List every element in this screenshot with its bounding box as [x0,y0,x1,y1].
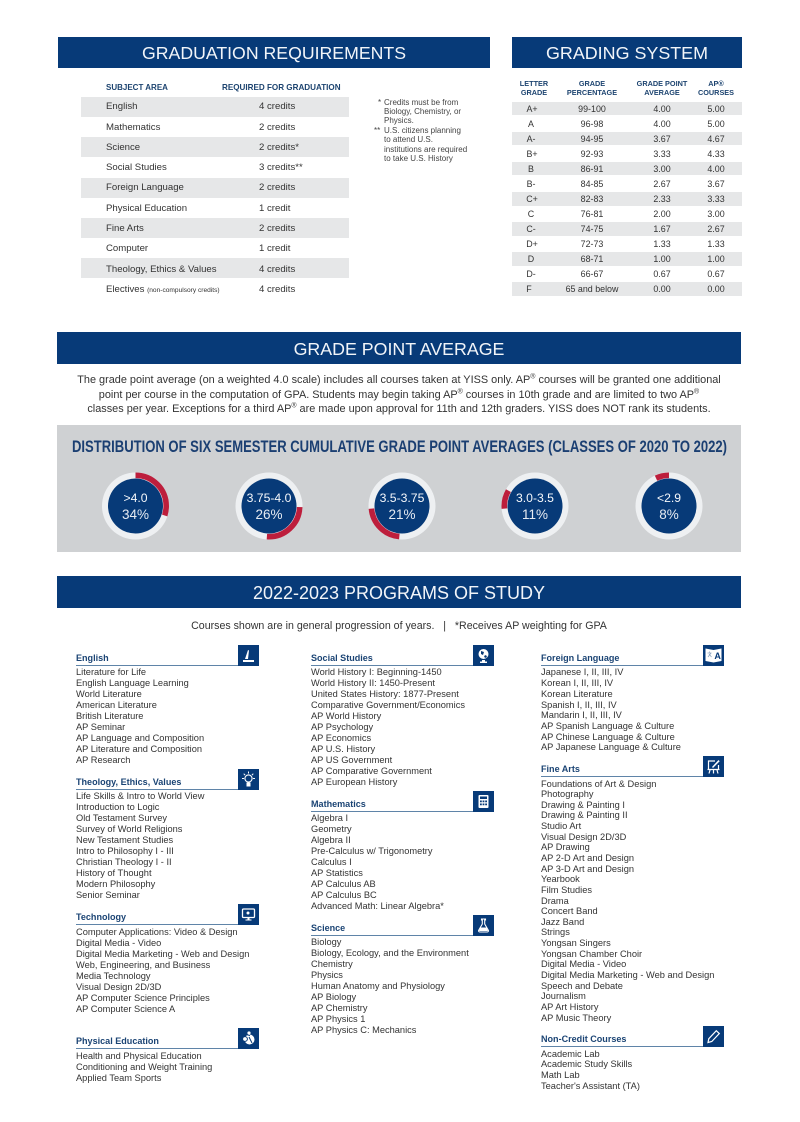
table: grading system: 2.00 [653,209,671,219]
footnotes: credit notes: Biology, Chemistry, or [384,107,461,116]
section: Social Studies: AP European History [311,776,397,786]
table: grading system: 1.33 [707,239,725,249]
table: grading system: 4.00 [653,104,671,114]
donut: 3.75-4.0: 26% [255,507,283,522]
table: grading system: D- [526,269,536,279]
section: Physical Education: Conditioning and Weight Training [76,1062,212,1072]
section: Foreign Language: Mandarin I, II, III, IV [541,710,622,720]
section: Physical Education: Physical Education [76,1036,159,1046]
icon: language book [703,645,724,666]
table: graduation requirements: 2 credits* [259,142,299,153]
table: grading system [512,79,742,296]
table: grading system: COURSES [698,88,734,97]
section: English: English [76,653,109,663]
table: grading system: 4.67 [707,134,725,144]
section: Fine Arts: Drawing & Painting I [541,800,625,810]
table: graduation requirements: Theology, Ethics & Values [106,264,217,275]
section: Technology: Media Technology [76,971,151,981]
section: Non-Credit Courses: Math Lab [541,1070,580,1080]
section: Fine Arts: Jazz Band [541,917,584,927]
table: graduation requirements: 4 credits [259,264,295,275]
text block: programs note: Courses shown are in general progression of years. | *Receives AP weighting for GPA [191,620,607,632]
section: Social Studies: Comparative Government/Economics [311,700,465,710]
section: English [76,645,259,764]
table: grading system: GRADE [521,88,547,97]
table: grading system: 4.00 [653,118,671,128]
section: Foreign Language: Foreign Language [541,653,619,663]
table: grading system: 0.67 [707,269,725,279]
section: English: AP Research [76,754,130,764]
section: Mathematics: Geometry [311,824,352,834]
icon: language book: A [714,651,721,661]
section: Fine Arts: Drama [541,896,569,906]
donut: 3.5-3.75 [368,472,436,540]
section: Theology, Ethics, Values [76,769,259,900]
donut: above 4.0: 34% [122,507,149,522]
table: grading system: 3.33 [653,149,671,159]
section: Fine Arts: Strings [541,927,570,937]
text block: gpa explanation [77,373,721,415]
donut: 3.0-3.5: 11% [522,507,548,522]
section: Science: AP Biology [311,992,356,1002]
section: Fine Arts: Studio Art [541,821,581,831]
section: Social Studies: AP Comparative Government [311,766,432,776]
table: grading system: 4.33 [707,149,725,159]
section: Fine Arts: Yongsan Chamber Choir [541,949,642,959]
section: Theology, Ethics, Values: Old Testament Survey [76,812,167,822]
section: Science: AP Chemistry [311,1002,367,1012]
table: grading system: B [528,164,534,174]
table: grading system: 4.00 [707,164,725,174]
footnotes: credit notes [374,98,467,163]
donut: below 2.9 [628,465,710,547]
heading: grading system: GRADING SYSTEM [546,43,708,63]
section: Mathematics: Calculus I [311,856,352,866]
section: Physical Education: Health and Physical Education [76,1051,202,1061]
table: grading system: 1.00 [707,254,725,264]
section: Mathematics: Mathematics [311,799,366,809]
section: Technology [76,904,259,1014]
table: grading system: 1.33 [653,239,671,249]
table: graduation requirements: Electives (non-compulsory credits) [106,284,220,295]
icon: light bulb [238,769,259,790]
section: Social Studies: AP U.S. History [311,744,375,754]
section: Fine Arts: Fine Arts [541,764,580,774]
donut: 3.75-4.0: 3.75-4.0 [247,491,292,505]
table: grading system: 74-75 [581,224,603,234]
section: Mathematics [311,791,494,911]
table: grading system: 1.00 [653,254,671,264]
table: grading system: 76-81 [581,209,603,219]
table: graduation requirements: 3 credits** [259,162,303,173]
heading: grade point average: GRADE POINT AVERAGE [294,339,504,359]
section: Foreign Language: AP Spanish Language & Culture [541,721,674,731]
text block: gpa explanation: classes per year. Exceptions for a third AP® are made upon approval for 11th and 12th graders. YISS does NOT rank its students. [87,403,711,415]
table: grading system: 72-73 [581,239,603,249]
footnotes: credit notes: * [378,98,381,106]
table: graduation requirements: Mathematics [106,122,160,133]
section: Foreign Language: Korean I, II, III, IV [541,678,613,688]
table: graduation requirements: 1 credit [259,243,290,254]
section: Science: AP Physics 1 [311,1014,365,1024]
section: Non-Credit Courses: Academic Lab [541,1048,600,1058]
icon: pen on book [238,645,259,666]
footnotes: credit notes: U.S. citizens planning [384,126,461,135]
section: Non-Credit Courses: Non-Credit Courses [541,1034,626,1044]
heading: programs of study [57,576,741,608]
table: grading system: 5.00 [707,118,725,128]
donut: 3.5-3.75: 21% [388,507,416,522]
section: Social Studies [311,645,494,787]
table: grading system: 68-71 [581,254,603,264]
section: Fine Arts: AP Art History [541,1002,598,1012]
table: grading system: 99-100 [578,104,606,114]
table: grading system: GRADE [579,79,605,88]
table: grading system: PERCENTAGE [567,88,617,97]
section: Non-Credit Courses: Academic Study Skills [541,1059,632,1069]
section: Non-Credit Courses: Teacher's Assistant (TA) [541,1081,640,1091]
section: English: American Literature [76,700,157,710]
section: Technology: Visual Design 2D/3D [76,982,161,992]
section: Social Studies: United States History: 1877-Present [311,688,459,698]
table: grading system: 66-67 [581,269,603,279]
section: Foreign Language: AP Japanese Language & Culture [541,742,681,752]
section: Non-Credit Courses [541,1026,724,1091]
section: Technology: Computer Applications: Video & Design [76,927,238,937]
section: English: AP Language and Composition [76,732,204,742]
footnotes: credit notes: ** [374,126,380,135]
table: grading system: 2.33 [653,194,671,204]
panel: gpa distribution [57,425,741,552]
table: grading system: 1.67 [653,224,671,234]
icon: pencil [703,1026,724,1047]
table: grading system: 96-98 [581,118,603,128]
table: grading system: A+ [526,104,538,114]
donut: above 4.0: >4.0 [123,491,148,505]
table: grading system: 92-93 [581,149,603,159]
section: Science: Human Anatomy and Physiology [311,980,445,990]
section: Theology, Ethics, Values: New Testament Studies [76,834,173,844]
icon: monitor [238,904,259,925]
donut: 3.5-3.75: 3.5-3.75 [380,491,425,505]
table: grading system: 5.00 [707,104,725,114]
section: Fine Arts: Digital Media Marketing - Web and Design [541,970,714,980]
footnotes: credit notes: Credits must be from [384,98,458,106]
donut: below 2.9: 8% [659,507,679,522]
section: Mathematics: Pre-Calculus w/ Trigonometry [311,846,433,856]
footnotes: credit notes: institutions are required [384,145,467,154]
icon: calculator [473,791,494,812]
section: Theology, Ethics, Values: Introduction to Logic [76,802,159,812]
table: grading system: A [528,118,534,128]
table: grading system: 0.00 [707,284,725,294]
section: Fine Arts [541,756,724,1023]
section: Social Studies: World History I: Beginning-1450 [311,666,442,676]
donut: 3.75-4.0 [236,472,302,540]
heading: programs of study: 2022-2023 PROGRAMS OF STUDY [253,583,545,603]
footnotes: credit notes: to take U.S. History [384,154,453,163]
section: Technology: Digital Media Marketing - Web and Design [76,949,249,959]
section: Science: Science [311,923,345,933]
section: English: AP Literature and Composition [76,744,202,754]
section: Foreign Language: AP Chinese Language & Culture [541,732,675,742]
section: Social Studies: World History II: 1450-Present [311,678,435,688]
table: graduation requirements: 1 credit [259,203,290,214]
section: Science: AP Physics C: Mechanics [311,1024,416,1034]
section: Fine Arts: Foundations of Art & Design [541,778,656,788]
table: graduation requirements: REQUIRED FOR GRADUATION [222,83,341,92]
table: grading system: AVERAGE [644,88,680,97]
table: grading system: 65 and below [566,284,618,294]
table: graduation requirements: 2 credits [259,182,295,193]
icon: globe [473,645,494,666]
section: Mathematics: Advanced Math: Linear Algebra* [311,900,444,910]
section: Mathematics: Algebra II [311,834,351,844]
section: Mathematics: Algebra I [311,812,348,822]
table: grading system: 86-91 [581,164,603,174]
section: Fine Arts: Concert Band [541,906,598,916]
table: grading system: F [526,284,532,294]
table: grading system: GRADE POINT [637,79,687,88]
section: Social Studies: AP World History [311,710,381,720]
section: Fine Arts: Visual Design 2D/3D [541,832,626,842]
table: graduation requirements: 2 credits [259,223,295,234]
section: Fine Arts: Photography [541,789,594,799]
footnotes: credit notes: to attend U.S. [384,135,433,144]
table: grading system: C- [526,224,536,234]
icon: flask [473,915,494,936]
icon: easel [703,756,724,777]
icon: sports balls [238,1028,259,1049]
table: graduation requirements: 2 credits [259,122,295,133]
section: Foreign Language: Korean Literature [541,689,613,699]
table: grading system: A- [527,134,535,144]
section: Fine Arts: Yongsan Singers [541,938,611,948]
table: graduation requirements: Science [106,142,140,153]
table: grading system: 0.00 [653,284,671,294]
table: grading system: 3.67 [653,134,671,144]
table: graduation requirements: Computer [106,243,148,254]
table: grading system: AP® [708,79,724,88]
table: graduation requirements: English [106,101,137,112]
section: Social Studies: AP Economics [311,732,371,742]
section: Science: Physics [311,970,343,980]
table: grading system: B+ [526,149,538,159]
section: Science: Biology [311,936,341,946]
table: grading system: 94-95 [581,134,603,144]
table: grading system: 0.67 [653,269,671,279]
table: grading system: 3.67 [707,179,725,189]
section: English: British Literature [76,710,143,720]
text block: gpa explanation: point per course in the computation of GPA. Students may begin taking AP® courses in 10th grade and are limited to two AP® [99,388,699,401]
donut: 3.0-3.5: 3.0-3.5 [516,491,554,505]
table: grading system: 3.33 [707,194,725,204]
section: Fine Arts: Journalism [541,991,586,1001]
section: English: English Language Learning [76,678,189,688]
table: grading system: 3.00 [707,209,725,219]
table: grading system: C+ [526,194,538,204]
section: Fine Arts: Yearbook [541,874,580,884]
section: Mathematics: AP Calculus BC [311,890,377,900]
section: Theology, Ethics, Values: Senior Seminar [76,890,140,900]
donut: above 4.0 [102,472,169,540]
section: Theology, Ethics, Values: Survey of World Religions [76,824,182,834]
section: Fine Arts: Drawing & Painting II [541,810,628,820]
table: grading system: C [528,209,534,219]
section: Theology, Ethics, Values: Theology, Ethics, Values [76,777,181,787]
table: grading system: 2.67 [653,179,671,189]
table: grading system: LETTER [520,79,548,88]
section: Science: Biology, Ecology, and the Environment [311,948,469,958]
table: grading system: 3.00 [653,164,671,174]
table: graduation requirements: 4 credits [259,284,295,295]
section: Fine Arts: AP 2-D Art and Design [541,853,634,863]
section: Theology, Ethics, Values: History of Thought [76,868,152,878]
section: Technology: Web, Engineering, and Business [76,960,210,970]
section: Theology, Ethics, Values: Christian Theology I - II [76,856,172,866]
section: Science [311,915,494,1035]
table: grading system: 84-85 [581,179,603,189]
section: Fine Arts: AP Drawing [541,842,590,852]
section: Technology: AP Computer Science A [76,1004,175,1014]
donut: below 2.9: <2.9 [657,491,681,505]
section: Social Studies: AP Psychology [311,722,373,732]
section: Physical Education [76,1028,259,1083]
section: Foreign Language: Spanish I, II, III, IV [541,700,617,710]
table: grading system: 82-83 [581,194,603,204]
section: Technology: Technology [76,912,126,922]
section: Fine Arts: Digital Media - Video [541,959,626,969]
footnotes: credit notes: Physics. [384,116,414,125]
section: English: AP Seminar [76,722,125,732]
section: Social Studies: Social Studies [311,653,373,663]
section: English: Literature for Life [76,666,146,676]
text block: gpa explanation: The grade point average (on a weighted 4.0 scale) includes all courses taken at YISS only. AP® courses will be granted one additional [77,373,721,386]
section: Mathematics: AP Statistics [311,868,363,878]
section: Technology: AP Computer Science Principles [76,993,210,1003]
table: grading system: B- [527,179,535,189]
heading: graduation requirements: GRADUATION REQUIREMENTS [142,43,406,63]
section: Theology, Ethics, Values: Intro to Philosophy I - III [76,846,174,856]
section: Fine Arts: AP 3-D Art and Design [541,864,634,874]
section: Foreign Language [541,645,724,752]
table: graduation requirements: Foreign Language [106,182,184,193]
table: grading system: 2.67 [707,224,725,234]
heading: grading system [512,37,742,68]
donut: 3.0-3.5 [502,472,568,540]
section: Theology, Ethics, Values: Life Skills & Intro to World View [76,790,204,800]
section: Mathematics: AP Calculus AB [311,878,376,888]
table: grading system: D [528,254,534,264]
section: Physical Education: Applied Team Sports [76,1073,161,1083]
section: Fine Arts: AP Music Theory [541,1013,611,1023]
section: Science: Chemistry [311,958,353,968]
table: grading system: D+ [526,239,538,249]
section: Fine Arts: Speech and Debate [541,981,623,991]
section: Technology: Digital Media - Video [76,938,161,948]
section: Foreign Language: Japanese I, II, III, IV [541,667,623,677]
table: graduation requirements: Physical Education [106,203,187,214]
table: graduation requirements: Social Studies [106,162,167,173]
section: Social Studies: AP US Government [311,754,392,764]
section: Theology, Ethics, Values: Modern Philosophy [76,878,155,888]
table: graduation requirements: Fine Arts [106,223,144,234]
table: graduation requirements: 4 credits [259,101,295,112]
table: graduation requirements [81,83,349,295]
heading: graduation requirements [58,37,490,68]
table: graduation requirements: SUBJECT AREA [106,83,168,92]
heading: grade point average [57,332,741,364]
section: Fine Arts: Film Studies [541,885,592,895]
section: English: World Literature [76,688,142,698]
